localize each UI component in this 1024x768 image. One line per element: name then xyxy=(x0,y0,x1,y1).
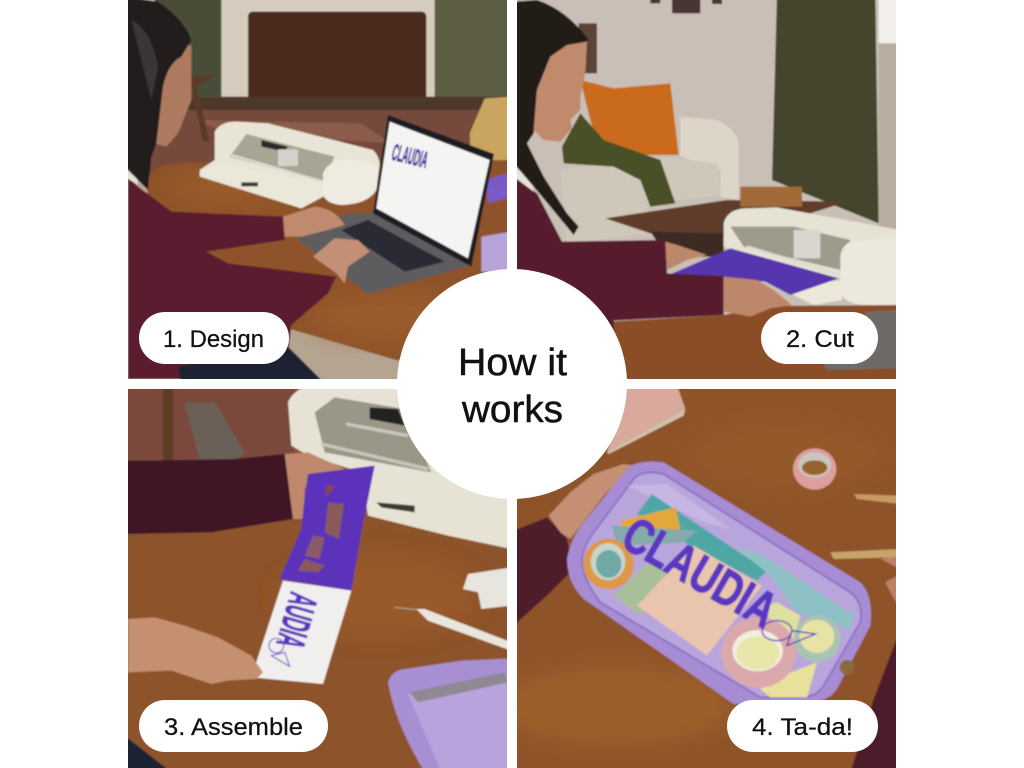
person with sweater xyxy=(514,0,792,383)
hand xyxy=(128,617,263,684)
label: 3. Assemble xyxy=(139,700,328,752)
panel: step 1 design photo xyxy=(128,0,507,379)
panel: step 2 cut photo xyxy=(517,0,896,379)
panel: step 4 ta-da photo xyxy=(517,389,896,768)
person with sweater xyxy=(125,0,370,383)
wooden table xyxy=(500,382,904,768)
right hand xyxy=(880,556,900,609)
orange tape xyxy=(583,539,634,589)
icon: cutting machine xyxy=(288,386,511,549)
label: 1. Design: 1. Design xyxy=(163,326,264,353)
purple pouch xyxy=(388,658,511,768)
laptop xyxy=(296,115,494,294)
vinyl strip: AUDIA xyxy=(268,588,325,653)
background floor and table xyxy=(121,382,515,768)
heading: how it works: How it xyxy=(458,342,567,384)
label: 2. Cut xyxy=(761,312,878,364)
wooden table xyxy=(128,160,511,361)
blue notes xyxy=(734,546,854,629)
hand xyxy=(665,242,707,270)
purple vinyl roll xyxy=(486,172,511,203)
plane doodle xyxy=(269,638,290,666)
panel: step 3 assemble photo xyxy=(128,389,507,768)
yellow green note xyxy=(767,602,800,642)
sofa and cushion xyxy=(560,80,739,243)
laptop: CLAUDIA xyxy=(389,139,431,173)
orange note xyxy=(620,507,680,536)
sage note xyxy=(614,561,674,616)
pink note xyxy=(637,546,762,656)
coffee table xyxy=(605,187,847,257)
washi tape roll xyxy=(793,448,836,490)
center circle xyxy=(397,269,627,499)
arm holding vinyl xyxy=(125,452,345,534)
plane doodle xyxy=(762,621,815,646)
weeding tool xyxy=(395,607,511,651)
hand xyxy=(283,207,345,237)
laptop corner xyxy=(824,310,900,370)
purple pouch xyxy=(481,232,511,272)
label: 4. Ta-da! xyxy=(727,700,878,752)
ruler sheet xyxy=(463,567,511,609)
vinyl strip xyxy=(251,466,375,684)
yellow base note xyxy=(760,662,817,697)
right sleeve xyxy=(850,629,900,768)
hand xyxy=(724,277,792,317)
label: 3. Assemble: 3. Assemble xyxy=(164,714,303,741)
pink tape xyxy=(721,617,796,688)
pencils xyxy=(830,494,900,559)
teal book xyxy=(637,494,767,581)
heading second line: works xyxy=(461,389,563,431)
icon: cutting machine xyxy=(200,122,380,208)
gray note xyxy=(612,526,697,546)
purple pouch with contents xyxy=(567,462,871,704)
left sleeve xyxy=(514,517,574,626)
wooden table xyxy=(610,305,900,383)
pink notebook xyxy=(607,386,685,454)
living room background xyxy=(121,0,515,387)
label: 1. Design xyxy=(139,312,289,364)
icon: cutting machine xyxy=(724,207,900,305)
left hand xyxy=(549,464,634,539)
purple vinyl sheet xyxy=(669,248,839,295)
label: 4. Ta-da!: 4. Ta-da! xyxy=(752,714,853,741)
label: 2. Cut: 2. Cut xyxy=(786,326,854,353)
zip pull xyxy=(840,660,854,675)
hand xyxy=(313,238,370,283)
green tape xyxy=(794,616,840,662)
word: CLAUDIA: CLAUDIA xyxy=(613,506,787,639)
living room background xyxy=(510,0,904,387)
